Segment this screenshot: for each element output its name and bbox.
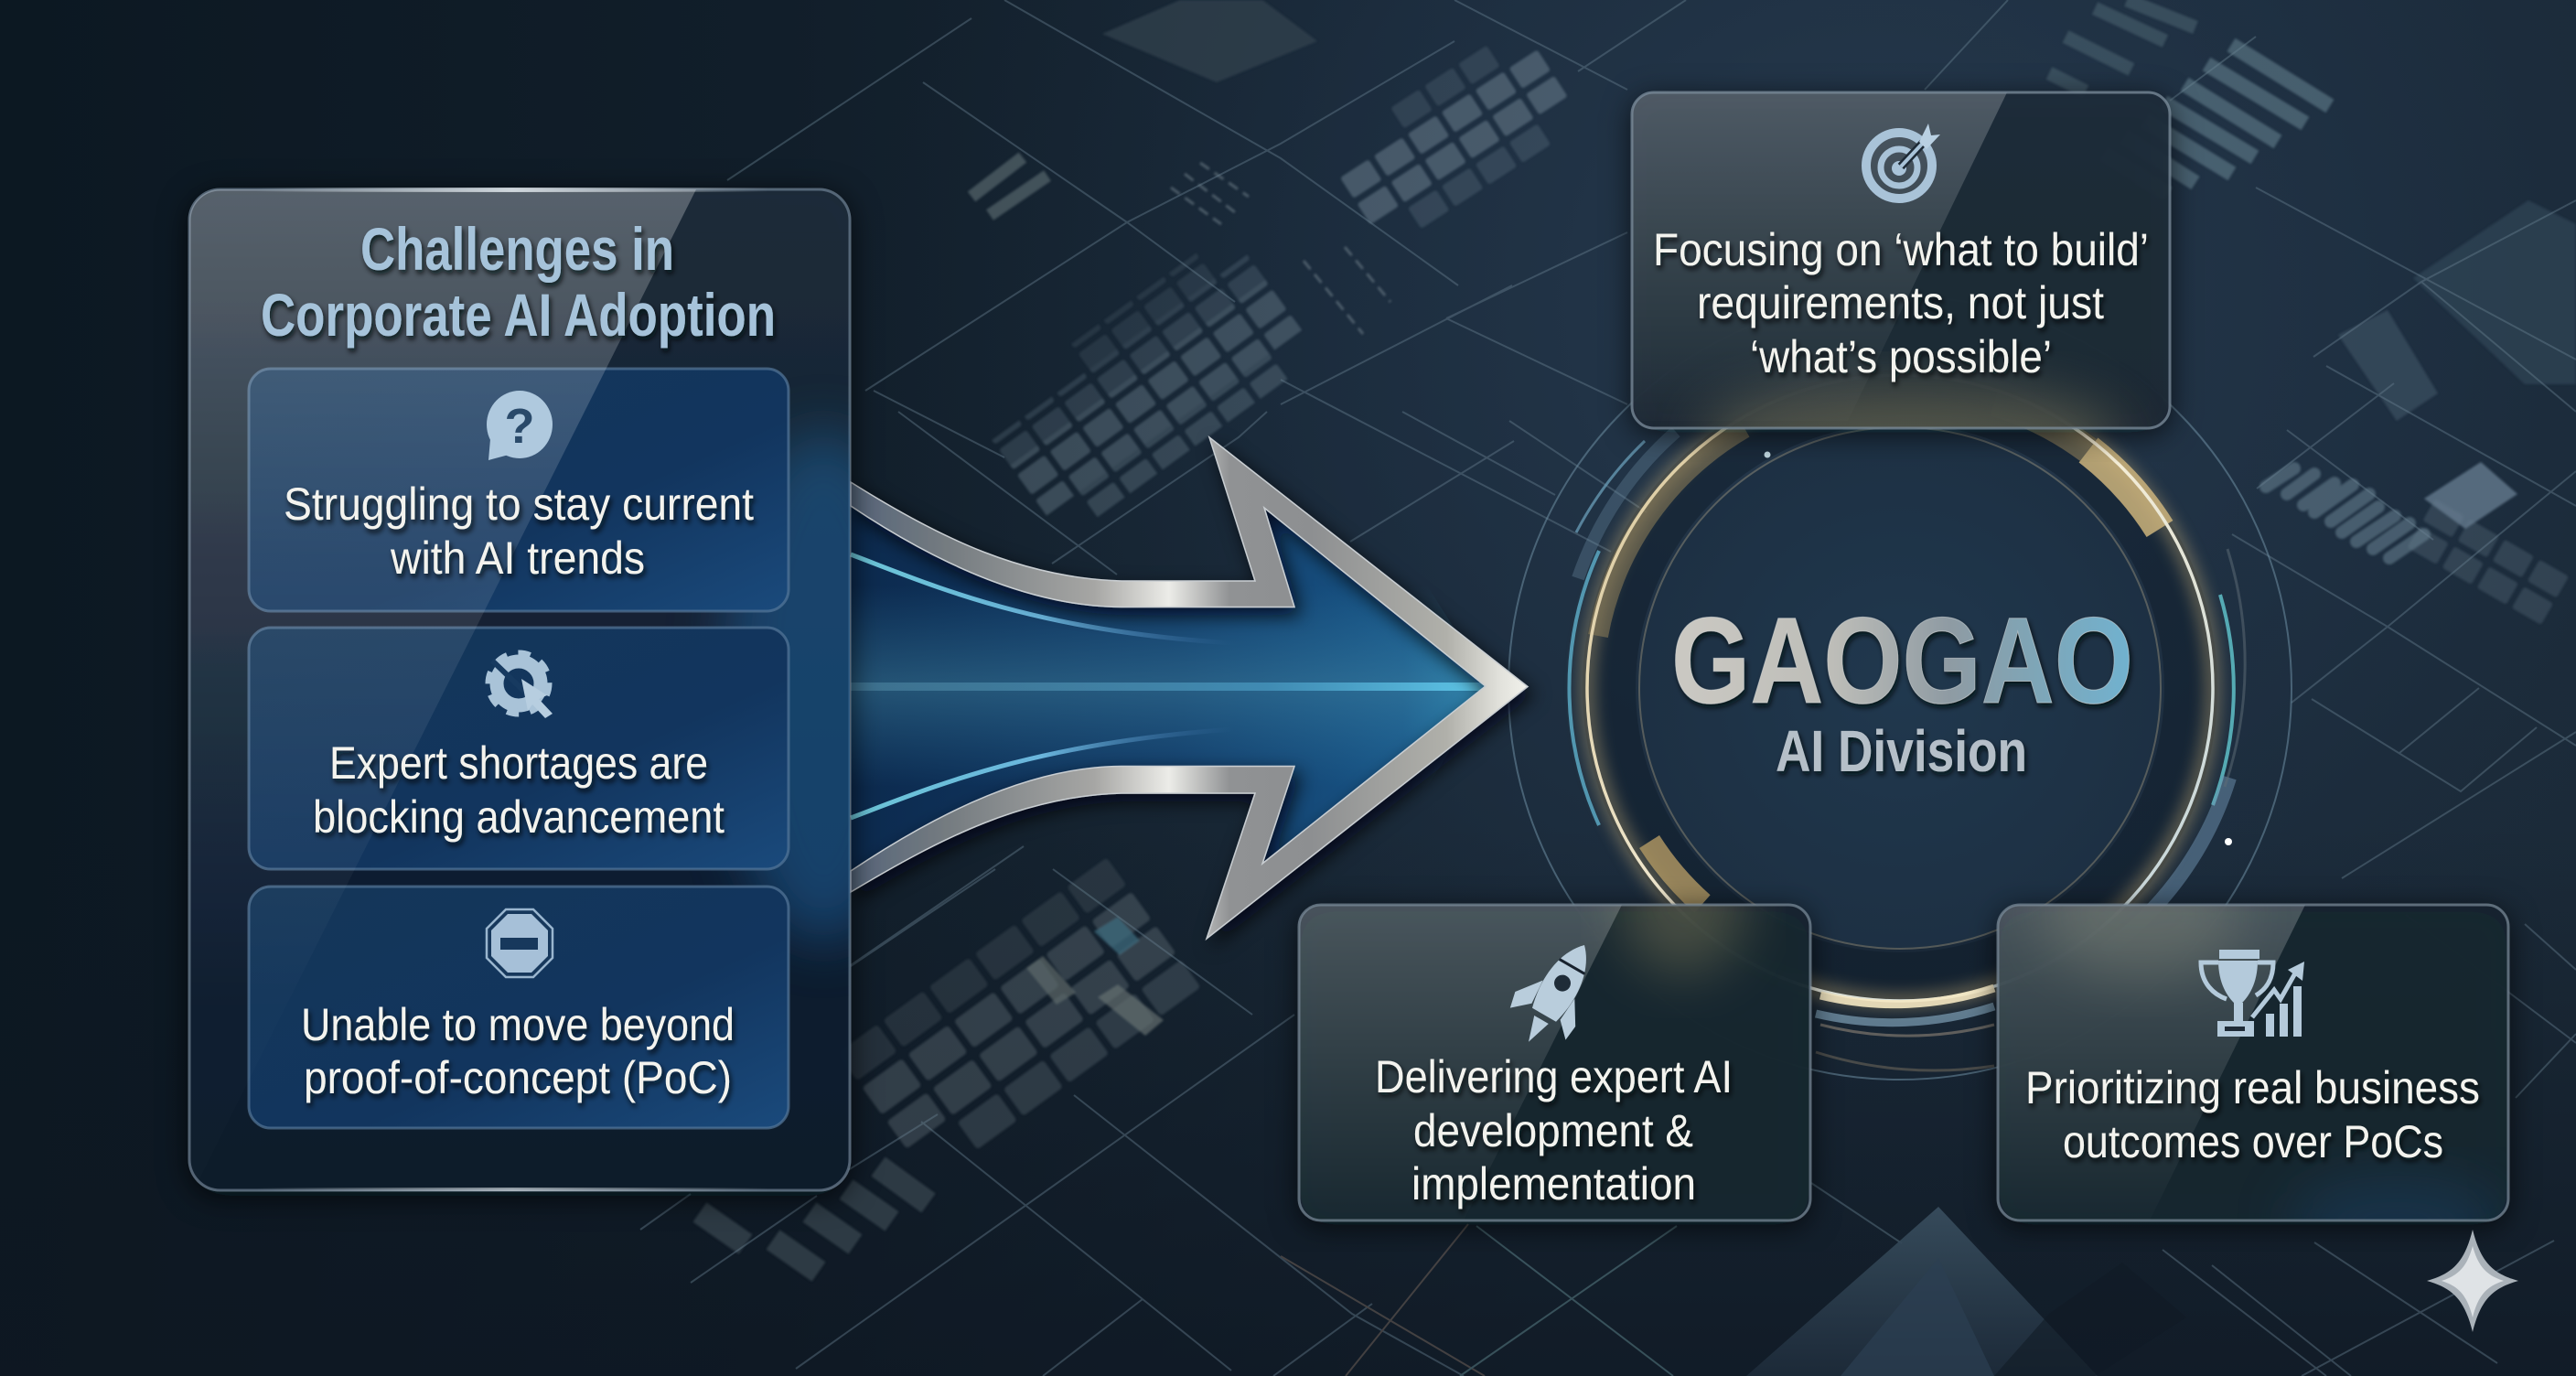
card: shortages xyxy=(249,628,789,869)
text: delivery: Delivering expert AI xyxy=(1375,1051,1733,1102)
text: trends: with AI trends xyxy=(390,532,645,584)
card: delivery xyxy=(1299,828,1810,1220)
text: outcomes: outcomes over PoCs xyxy=(2063,1116,2443,1167)
text: shortages: blocking advancement xyxy=(313,791,724,843)
icon: question bubble xyxy=(487,391,553,460)
panel heading: Challenges in xyxy=(360,215,674,283)
card: trends xyxy=(249,369,789,611)
text: delivery: implementation xyxy=(1411,1158,1696,1209)
card: requirements xyxy=(1632,92,2170,494)
icon: sparkle watermark xyxy=(2427,1230,2518,1332)
text: poc: Unable to move beyond xyxy=(301,999,735,1050)
center label: AI Division xyxy=(1776,718,2027,784)
panel: challenges xyxy=(189,188,924,1199)
text: shortages: Expert shortages are xyxy=(329,737,708,789)
text: requirements xyxy=(1653,224,2149,382)
text: poc: proof-of-concept (PoC) xyxy=(304,1052,732,1103)
text: outcomes xyxy=(2025,1062,2480,1167)
text: delivery: development & xyxy=(1413,1105,1693,1156)
icon: rocket xyxy=(1497,927,1613,1059)
text: outcomes: Prioritizing real business xyxy=(2025,1062,2480,1113)
text: requirements: requirements, not just xyxy=(1697,277,2104,328)
text: shortages xyxy=(313,737,724,843)
central ring graphic xyxy=(1508,296,2292,1080)
card: poc xyxy=(249,887,789,1128)
text: requirements: Focusing on ‘what to build’ xyxy=(1653,224,2149,275)
card: outcomes xyxy=(1998,851,2508,1266)
icon: stop sign xyxy=(487,909,553,977)
center label xyxy=(1671,593,2133,784)
panel heading: Corporate AI Adoption xyxy=(261,281,776,349)
panel heading xyxy=(261,215,776,349)
icon: gear with cursor xyxy=(489,654,553,718)
icon: question bubble: ? xyxy=(505,399,534,454)
text: poc xyxy=(301,999,735,1103)
text: trends xyxy=(284,478,754,584)
text: trends: Struggling to stay current xyxy=(284,478,754,530)
text: delivery xyxy=(1375,1051,1733,1209)
text: requirements: ‘what’s possible’ xyxy=(1750,331,2052,382)
icon: target xyxy=(1866,124,1940,199)
icon: trophy with chart xyxy=(2201,950,2304,1037)
center label: GAOGAO xyxy=(1671,593,2133,729)
arrow xyxy=(851,437,1528,939)
